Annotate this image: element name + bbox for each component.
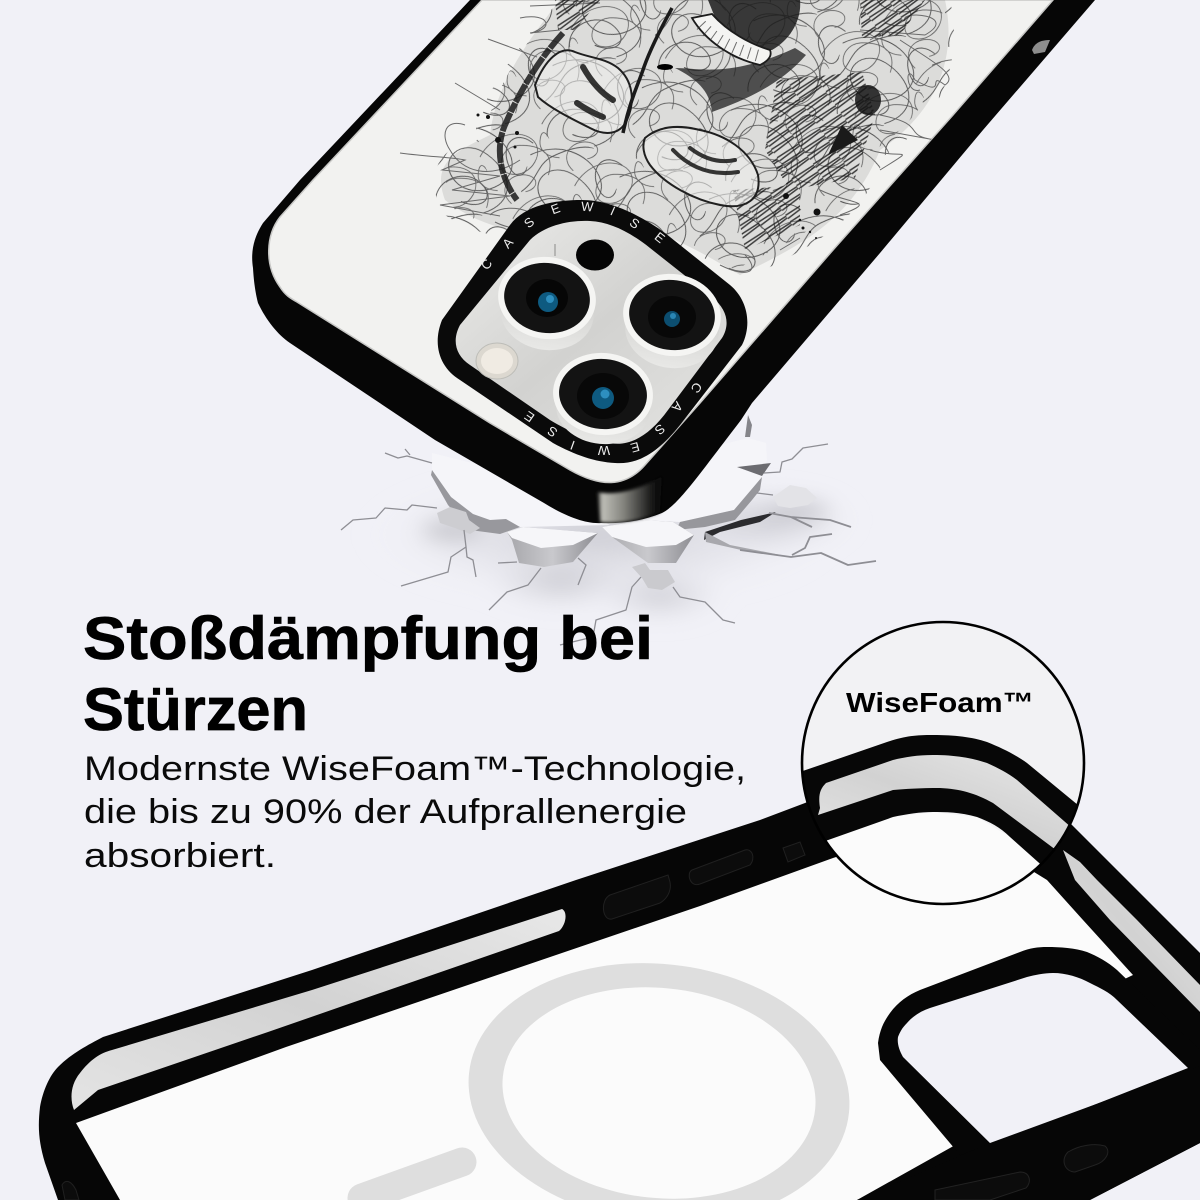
glasses left	[535, 50, 632, 133]
teeth	[692, 14, 771, 65]
triangle shard	[737, 463, 771, 476]
small rock left	[437, 507, 480, 534]
case frame	[39, 760, 1200, 1200]
camera cutout frame	[878, 947, 1200, 1155]
glasses right	[643, 127, 759, 206]
scribble loops layer two	[446, 0, 944, 270]
microphone	[554, 244, 556, 256]
body text: die bis zu 90% der Aufprallenergie	[84, 793, 687, 831]
CASEWISE lettering on camera ring: A	[499, 235, 516, 251]
sensor hole	[576, 240, 614, 270]
rock chunk left center	[507, 527, 598, 567]
stray scribble lines	[400, 0, 949, 272]
scribble portrait artwork	[400, 0, 954, 280]
CASEWISE lettering on camera ring: E	[629, 439, 641, 456]
spike	[745, 415, 752, 437]
eye left	[577, 67, 613, 117]
magnet alignment bar	[362, 1162, 462, 1198]
small rock right	[773, 485, 817, 508]
side buttons	[62, 842, 805, 1200]
lens bottom	[550, 349, 656, 448]
camera island ring	[438, 200, 747, 463]
ear inner	[828, 125, 858, 155]
cracks	[341, 444, 876, 645]
heading: Stürzen	[83, 676, 308, 743]
magnified foam strip	[818, 755, 1072, 850]
camera plate	[456, 221, 727, 444]
speaker slot	[935, 1172, 1029, 1200]
CASEWISE lettering on camera ring: S	[521, 214, 538, 231]
heading	[83, 605, 653, 743]
CASEWISE lettering on camera ring: C	[478, 256, 495, 273]
crater shadow	[360, 465, 860, 624]
CASEWISE lettering on camera ring: I	[608, 203, 618, 218]
rock chunk center right	[602, 520, 694, 563]
dark crack	[704, 512, 776, 540]
ink specks	[476, 114, 820, 239]
flash	[476, 343, 518, 379]
CASEWISE lettering on camera ring: C	[688, 379, 705, 396]
scribble tone	[441, 0, 949, 275]
right plate edge	[676, 477, 762, 530]
nose line	[623, 8, 672, 133]
body text	[84, 750, 746, 875]
CASEWISE lettering on camera ring: E	[549, 200, 562, 217]
foam strip right	[1063, 850, 1200, 1012]
camera cutout opening	[898, 973, 1188, 1145]
mouth interior	[708, 0, 800, 50]
left plate	[432, 453, 610, 527]
lens upper left	[493, 251, 601, 356]
CASEWISE lettering on camera ring: S	[651, 421, 668, 438]
magnifier contents	[804, 735, 1076, 871]
magnifier outline	[802, 622, 1084, 904]
top phone with case	[252, 0, 1095, 523]
WiseFoam label: WiseFoam™	[846, 687, 1034, 718]
ear	[855, 85, 881, 115]
body text: absorbiert.	[84, 837, 276, 875]
CASEWISE lettering on camera ring: S	[627, 215, 643, 232]
CASEWISE lettering on camera ring: W	[581, 199, 595, 214]
side button detail	[1032, 40, 1050, 54]
left plate edge	[431, 470, 520, 534]
CASEWISE lettering on camera ring	[478, 199, 705, 458]
right slab edge	[705, 532, 791, 557]
scribble loops layer one	[434, 0, 954, 280]
dark hatch zones	[555, 0, 925, 250]
CASEWISE lettering on camera ring: A	[669, 399, 686, 415]
case body	[252, 0, 1095, 523]
case tip highlight	[597, 476, 662, 523]
port	[1064, 1145, 1108, 1172]
bottom edge band overlay	[857, 1066, 1200, 1200]
lower white area	[827, 812, 1040, 902]
cracked ground impact	[341, 415, 876, 645]
right plate	[640, 438, 767, 522]
tooth lines	[701, 25, 763, 57]
rock top left center	[507, 527, 598, 548]
nose shadow	[675, 48, 806, 112]
CASEWISE lettering on camera ring: S	[544, 423, 560, 440]
CASEWISE lettering on camera ring: E	[521, 408, 537, 425]
clear back panel	[76, 820, 1133, 1200]
magnified frame band	[804, 735, 1076, 864]
nostril	[657, 64, 673, 70]
dark contour left	[500, 33, 563, 200]
lens right	[618, 268, 726, 374]
small rocks bottom	[632, 563, 675, 590]
CASEWISE lettering on camera ring: W	[597, 443, 610, 458]
magnifier callout: WiseFoam	[800, 620, 1090, 910]
lower phone case, inside view	[39, 760, 1200, 1200]
heading: Stoßdämpfung bei	[83, 605, 653, 672]
magnetic ring	[456, 945, 862, 1200]
eye right	[673, 148, 738, 173]
rock top center right	[602, 520, 694, 547]
CASEWISE lettering on camera ring: E	[652, 229, 668, 246]
CASEWISE lettering on camera ring: I	[568, 438, 577, 453]
body text: Modernste WiseFoam™-Technologie,	[84, 750, 746, 788]
foam strip left	[72, 909, 566, 1110]
glass back	[269, 0, 1053, 483]
